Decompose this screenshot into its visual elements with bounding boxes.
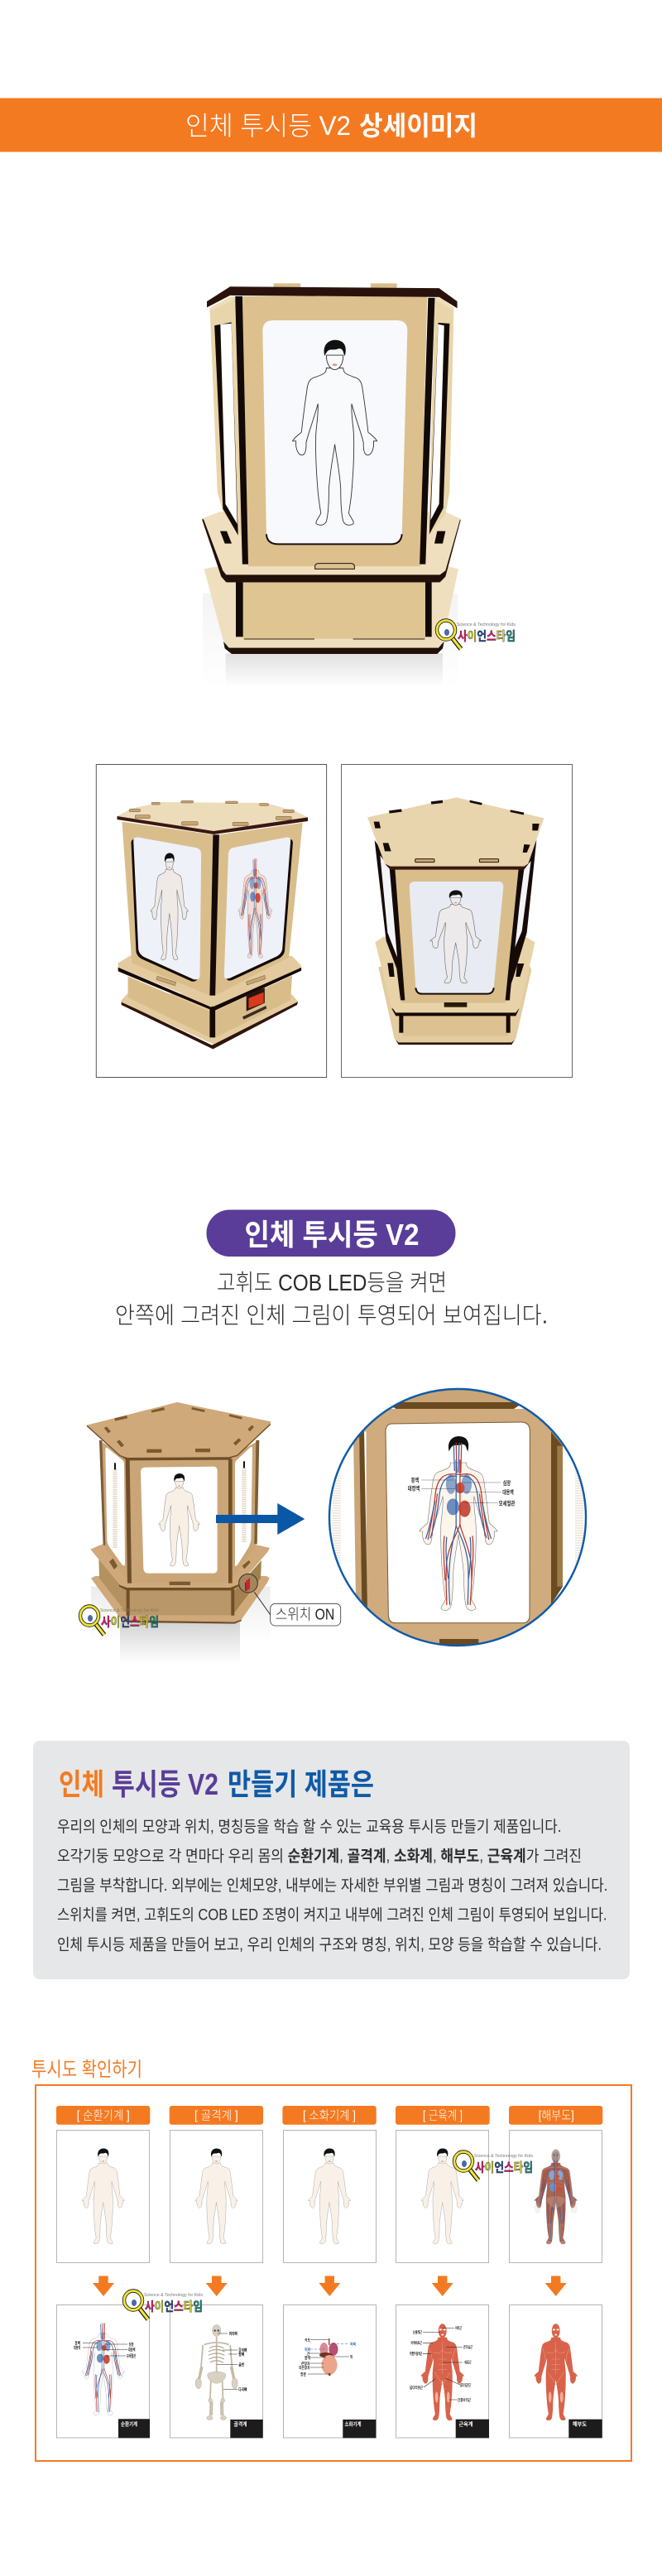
logo: science time over column 1: 사이언스타임 [145, 2300, 203, 2314]
organs [319, 2338, 338, 2376]
card: inside view: 배곧은근 [465, 2359, 472, 2366]
callout labels on diagram: 심장 [503, 1479, 511, 1487]
panel heading: 만들기 제품은 [228, 1767, 374, 1801]
card: inside view: 눈둘레근 [413, 2329, 423, 2335]
card: inside view: 머리뼈 [229, 2331, 237, 2337]
card: inside view: 넙다리빗근 [410, 2385, 424, 2391]
callout: switch on [271, 1603, 341, 1626]
card: outside view [510, 2131, 602, 2263]
arrow down [206, 2276, 228, 2296]
callout labels on diagram [408, 1477, 515, 1507]
arrow: blue pointing right [216, 1503, 305, 1535]
card: inside view: 동맥 [74, 2341, 80, 2346]
card: outside view [56, 2131, 149, 2263]
section frame [36, 2085, 631, 2461]
card: inside view: 위 [350, 2354, 353, 2360]
panel body text: 우리의 인체의 모양과 위치, 명칭등을 학습 할 수 있는 교육용 투시등 만들기 제품입니다. [57, 1818, 561, 1836]
panel body text [57, 1818, 607, 1954]
logo: science time: Science & Technology for Kids [457, 622, 516, 627]
card: inside view: 큰가슴근 [463, 2344, 473, 2350]
figure: outline on left window [151, 853, 189, 960]
tag [396, 2106, 490, 2125]
figure: circulatory system [420, 1436, 497, 1610]
tag: [ 근육계 ] [423, 2109, 463, 2122]
card: inside view: 식도 [305, 2338, 310, 2343]
section heading: check the see-through view: 투시도 확인하기 [31, 2059, 142, 2081]
title banner: 상세이미지 [359, 111, 477, 141]
tag: [ 순환기계 ] [77, 2109, 130, 2122]
card: inside view [170, 2304, 263, 2438]
tag: [ 골격계 ] [194, 2109, 238, 2122]
callout: switch on: 스위치 ON [276, 1606, 334, 1622]
description text: 고휘도 COB LED등을 켜면 [217, 1270, 447, 1295]
card: inside view: 골반 [238, 2362, 245, 2367]
title banner: 인체 투시등 V2 [185, 111, 351, 141]
column 4: muscle [396, 2106, 490, 2438]
card: inside view: 허파 [305, 2347, 310, 2353]
column 5: anatomy [509, 2106, 602, 2438]
callout labels on diagram: 대동맥 [502, 1488, 514, 1496]
card: inside view: 긴종아리근 [458, 2397, 472, 2403]
illustration: lamp with switch on [87, 1402, 341, 1664]
panel body text: 오각기둥 모양으로 각 면마다 우리 몸의 순환기계, 골격계, 소화계, 해부도, 근육계가 그려진 [57, 1848, 582, 1866]
arrow down [319, 2276, 340, 2296]
logo: science time over column 4: 사이언스타임 [475, 2160, 533, 2175]
arrow down [432, 2276, 453, 2296]
card: inside view: 위팔두갈래근 [410, 2351, 423, 2357]
logo: science time on illustration: Science & Technology for Kids [100, 1608, 160, 1613]
card: inside view: 해부도 [573, 2420, 587, 2428]
card: inside view: 다리뼈 [238, 2387, 247, 2392]
callout labels on diagram: 모세혈관 [499, 1499, 515, 1507]
card: outside view [170, 2131, 263, 2263]
card: inside view: 쓸개 [305, 2355, 310, 2361]
column 2: skeleton [170, 2106, 263, 2438]
card: inside view: 대정맥 [74, 2345, 80, 2351]
card: inside view: 심장 [129, 2342, 134, 2348]
tag [509, 2106, 602, 2125]
callout labels on diagram: 동맥 [411, 1477, 419, 1483]
logo: science time over column 1 [124, 2291, 204, 2319]
card: inside view: 갈비뼈 [238, 2348, 247, 2353]
tag: [해부도] [539, 2109, 574, 2122]
lamp base [202, 512, 461, 687]
info panel [33, 1741, 630, 1979]
card: inside view [56, 2304, 150, 2438]
card: inside view: 어깨세모근 [410, 2340, 422, 2346]
purple pill heading: 인체 투시등 V2 [245, 1218, 419, 1252]
logo: science time over column 4: Science & Technology for Kids [474, 2154, 534, 2159]
product photo: lamp front view [202, 283, 461, 687]
panel heading: 투시등 V2 [112, 1767, 218, 1801]
tag [282, 2106, 377, 2125]
card: inside view: 넙다리곧은근 [460, 2382, 471, 2388]
card: inside view: 허파 [350, 2341, 356, 2348]
card: inside view: 대동맥 [128, 2348, 136, 2353]
title banner [0, 98, 662, 152]
panel heading [59, 1767, 374, 1801]
panel body text: 인체 투시등 제품을 만들어 보고, 우리 인체의 구조와 명칭, 위치, 모양 등을 학습할 수 있습니다. [57, 1935, 602, 1954]
callout labels on diagram: 대정맥 [408, 1485, 420, 1492]
logo: science time on illustration [80, 1606, 160, 1635]
logo: science time: 사이언스타임 [458, 629, 516, 644]
tag [56, 2106, 150, 2125]
tag [170, 2106, 263, 2125]
card: outside view [396, 2131, 488, 2263]
column 1: circulatory [56, 2106, 150, 2438]
card: inside view: 소화기계 [344, 2420, 362, 2428]
card: inside view: 팔뼈 [238, 2352, 245, 2357]
panel body text: 그림을 부착합니다. 외부에는 인체모양, 내부에는 자세한 부위별 그림과 명칭이 그려져 있습니다. [57, 1877, 607, 1895]
card: inside view: 순환기계 [121, 2420, 137, 2428]
photo frame 2: top view [341, 765, 573, 1078]
card: inside view [510, 2304, 602, 2438]
card: inside view: 큰창자 [301, 2361, 310, 2367]
logo: science time on illustration: 사이언스타임 [101, 1616, 159, 1629]
card: inside view [283, 2304, 376, 2438]
card: inside view [396, 2304, 489, 2438]
logo: science time [437, 621, 516, 649]
tag: [ 소화기계 ] [303, 2109, 356, 2122]
logo: science time over column 1: Science & Technology for Kids [144, 2293, 204, 2298]
card: inside view: 근육계 [458, 2420, 473, 2428]
figure: glowing body [159, 1473, 200, 1566]
figure: circulatory on right window [238, 858, 272, 958]
photo frame 1: angled view [96, 765, 327, 1078]
figure: outline [430, 891, 481, 983]
description text [115, 1270, 548, 1328]
card: outside view [283, 2131, 376, 2263]
card: inside view: 이마근 [455, 2325, 462, 2331]
card: inside view: 모세혈관 [127, 2353, 136, 2359]
figure: outline body [293, 340, 377, 525]
panel heading: 인체 [59, 1767, 104, 1801]
arrow down [545, 2276, 567, 2296]
card: inside view: 간 [307, 2351, 309, 2357]
purple pill heading [207, 1210, 455, 1257]
magnified circle: circulatory view [329, 1382, 604, 1646]
description text: 안쪽에 그려진 인체 그림이 투영되어 보여집니다. [115, 1303, 548, 1328]
card: inside view: 골격계 [233, 2420, 247, 2428]
logo: science time over column 4 [454, 2152, 534, 2180]
card: inside view: 항문 [300, 2372, 306, 2377]
column 3: digestive [282, 2106, 377, 2438]
arrow down [93, 2276, 114, 2296]
card: inside view: 작은창자 [299, 2365, 310, 2371]
